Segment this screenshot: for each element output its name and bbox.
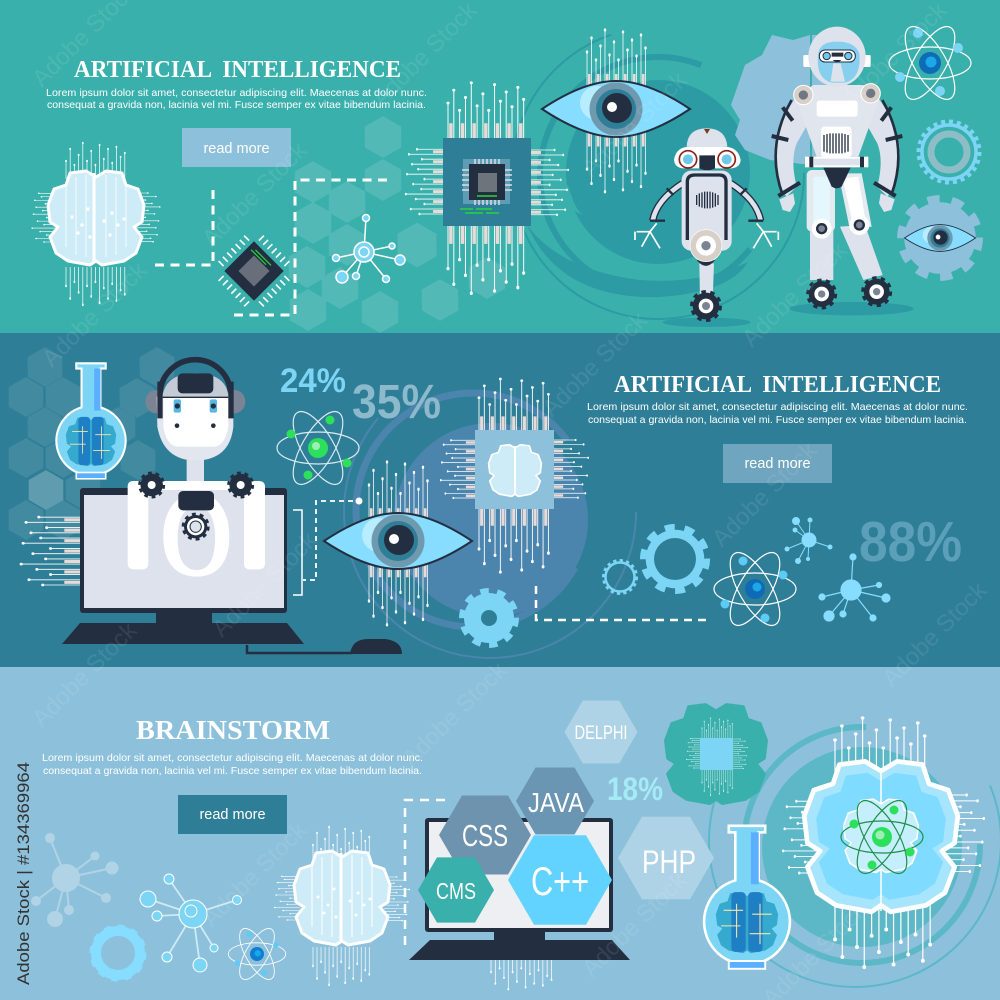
icon: chip with brain <box>441 379 588 572</box>
stock watermark: Adobe Stock <box>577 866 693 982</box>
stock watermark: Adobe Stock <box>837 0 953 112</box>
big robot <box>772 27 914 315</box>
spiral behind eye <box>344 366 636 658</box>
spiral behind brain <box>709 695 1000 987</box>
read more button <box>178 795 287 834</box>
read more button: read more <box>199 807 266 823</box>
icon: faint molecule <box>32 834 118 926</box>
icon: central processor with circuit pins <box>406 83 568 293</box>
icon: solid blue gear <box>462 591 516 645</box>
heading: ARTIFICIAL INTELLIGENCE <box>614 372 941 398</box>
body text <box>46 87 427 111</box>
dashed connector <box>536 586 712 620</box>
heading: BRAINSTORM <box>136 715 330 745</box>
stock watermark: Adobe Stock <box>367 0 483 112</box>
body text <box>42 752 423 777</box>
icon: large eye with pins <box>542 30 690 192</box>
background hexagons <box>280 111 514 338</box>
icon: large eye <box>324 462 472 625</box>
hexagon C++ <box>508 835 612 925</box>
pins under monitor <box>491 955 551 989</box>
icon: green atom <box>277 404 359 492</box>
stock watermark: Adobe Stock <box>397 656 513 772</box>
body text: consequat a gravida non, lacinia vel mi. Fusce semper ex vitae bibendum lacinia. <box>47 99 426 111</box>
icon: atom top right <box>889 19 971 107</box>
stock watermark: Adobe Stock <box>197 136 313 252</box>
icon: molecule large <box>819 554 890 621</box>
highlighted hexagon <box>20 465 72 515</box>
read more button <box>723 444 832 483</box>
stock watermark: Adobe Stock <box>577 66 693 182</box>
hexagon DELPHI <box>564 701 638 763</box>
stock id vertical text: Adobe Stock | #134369964 <box>14 762 33 985</box>
body text: Lorem ipsum dolor sit amet, consectetur adipiscing elit. Maecenas at dolor nunc. <box>42 752 423 764</box>
icon: blue atom <box>714 545 796 633</box>
hexagon CSS: CSS <box>462 818 508 853</box>
panel: middle artificial intelligence banner <box>0 333 1000 667</box>
read more button <box>182 128 291 167</box>
icon: small gear <box>604 560 636 594</box>
stat 24%: 24% <box>280 362 346 400</box>
computer monitor <box>62 488 304 644</box>
hexagon PHP: PHP <box>642 844 696 880</box>
stock watermark: Adobe Stock <box>197 816 313 932</box>
small robot <box>635 128 778 327</box>
stock watermark: Adobe Stock <box>877 576 993 692</box>
icon: atom <box>228 924 286 984</box>
dashed connector <box>405 800 445 950</box>
stat 88%: 88% <box>859 510 962 574</box>
hexagon CMS: CMS <box>436 878 476 904</box>
hexagon PHP <box>618 817 714 899</box>
icon: molecule small <box>785 518 832 564</box>
brain silhouette behind robot <box>731 35 840 165</box>
hexagon DELPHI: DELPHI <box>574 723 628 744</box>
icon: molecule network <box>332 214 405 283</box>
dashed connectors <box>153 180 387 315</box>
stock watermark: Adobe Stock <box>737 236 853 352</box>
stock watermark: Adobe Stock <box>707 436 823 552</box>
background hexagons <box>0 342 183 545</box>
stock watermark: Adobe Stock <box>537 306 653 422</box>
body text: consequat a gravida non, lacinia vel mi. Fusce semper ex vitae bibendum lacinia. <box>43 765 422 777</box>
spiral behind robots <box>512 27 804 319</box>
hexagon JAVA <box>516 767 594 835</box>
panel: bottom brainstorm banner <box>0 667 1000 1000</box>
icon: small processor chip <box>209 226 299 316</box>
heading: ARTIFICIAL INTELLIGENCE <box>74 57 401 83</box>
icon: gear with eye <box>901 199 979 277</box>
body text: Lorem ipsum dolor sit amet, consectetur adipiscing elit. Maecenas at dolor nunc. <box>46 87 427 99</box>
hexagon CSS <box>439 795 531 875</box>
stock watermark: Adobe Stock <box>37 256 153 372</box>
dashed connector and bracket <box>293 498 362 595</box>
body text: Lorem ipsum dolor sit amet, consectetur adipiscing elit. Maecenas at dolor nunc. <box>587 401 968 413</box>
hexagon JAVA: JAVA <box>528 787 584 818</box>
icon: flask with brain <box>56 363 126 479</box>
icon: gear outline <box>91 926 145 980</box>
left circuit pins <box>21 517 80 585</box>
stat 35%: 35% <box>352 376 441 429</box>
icon: big circuit brain with atom <box>783 718 984 967</box>
icon: blue gear outline <box>918 122 980 182</box>
body text: consequat a gravida non, lacinia vel mi. Fusce semper ex vitae bibendum lacinia. <box>588 414 967 426</box>
stock watermark: Adobe Stock <box>27 616 143 732</box>
icon: circuit brain <box>275 827 409 985</box>
icon: flask with brain <box>704 826 790 969</box>
computer monitor <box>409 818 630 960</box>
read more button: read more <box>203 141 270 157</box>
robot in monitor <box>128 360 265 577</box>
mouse and cable <box>247 639 402 654</box>
icon: circuit brain <box>32 143 160 305</box>
stock watermark: Adobe Stock <box>207 526 323 642</box>
icon: teal brain with chip <box>666 705 766 803</box>
stat 18%: 18% <box>607 771 663 807</box>
body text <box>587 401 968 426</box>
hexagon C++: C++ <box>531 860 589 904</box>
read more button: read more <box>744 456 811 472</box>
hexagon CMS <box>418 857 494 923</box>
icon: molecule <box>140 874 242 972</box>
panel: top artificial intelligence banner <box>0 0 1000 338</box>
icon: medium gear <box>643 527 707 591</box>
